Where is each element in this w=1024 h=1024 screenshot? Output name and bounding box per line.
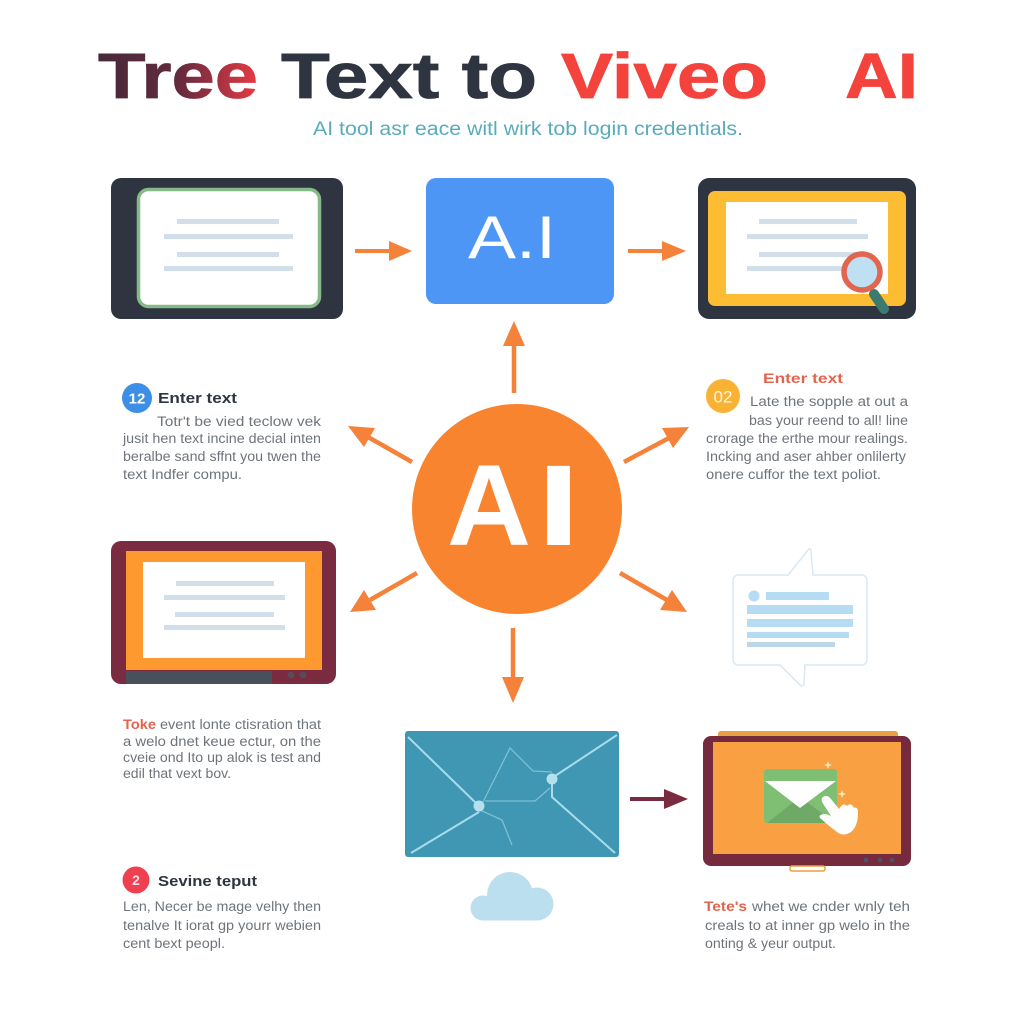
title: Text to: [281, 40, 537, 112]
panel: teal envelope: [405, 731, 619, 857]
text block: step 12: Totr't be vied teclow vek: [157, 414, 321, 429]
text block: Tete's: [704, 898, 910, 951]
panel: maroon tablet: [111, 541, 336, 684]
text block: Tete's: Tete's: [704, 898, 747, 914]
text block: step 2: [122, 866, 321, 951]
badge: 12: [122, 383, 152, 413]
arrow: envelope to tablet: [630, 789, 688, 809]
text block: Tete's: onting & yeur output.: [705, 936, 836, 951]
icon: hand pointer: [820, 796, 858, 834]
icon: green envelope: [764, 769, 837, 823]
arrow: lower left: [350, 573, 417, 612]
text block: step 12: jusit hen text incine decial inten: [122, 431, 321, 446]
text block: step 2: tenalve It iorat gp yourr webien: [123, 918, 321, 933]
text block: Tete's: whet we cnder wnly teh: [751, 899, 910, 914]
text block: step 02: [706, 370, 909, 482]
arrow: upper left: [348, 426, 412, 462]
text block: step 02: Late the sopple at out a: [750, 394, 909, 409]
central AI circle: [412, 404, 622, 614]
panel: chat bubble: [733, 549, 867, 686]
arrow: down: [502, 628, 524, 703]
text block: Toke: event lonte ctisration that: [160, 717, 321, 732]
badge: 2: [122, 866, 150, 894]
panel: text input tablet: [111, 178, 343, 319]
badge: 02: [706, 379, 740, 413]
text block: step 2: Sevine teput: [158, 873, 257, 890]
arrow: upper right: [624, 427, 689, 462]
text block: Toke: [123, 716, 321, 781]
panel: email tablet: [703, 731, 911, 871]
text block: step 02: onere cuffor the text poliot.: [706, 467, 881, 482]
text block: Toke: edil that vext bov.: [123, 766, 231, 781]
badge: 2: 2: [132, 872, 140, 888]
subtitle: AI tool asr eace witl wirk tob login credentials.: [313, 119, 743, 140]
panel: A.I blue box: [426, 178, 614, 304]
text block: Toke: a welo dnet keue ectur, on the: [123, 734, 321, 749]
text block: step 12: beralbe sand sffnt you twen the: [123, 449, 321, 464]
icon: cloud: [470, 872, 554, 920]
title: Tree: [98, 40, 258, 112]
text block: step 12: Enter text: [158, 390, 237, 407]
panel: review tablet with magnifier: [698, 178, 916, 319]
arrow: AI to review: [628, 241, 686, 261]
text block: step 02: bas your reend to all! line: [749, 413, 908, 428]
arrow: up: [503, 321, 525, 393]
text block: Tete's: creals to at inner gp welo in the: [705, 918, 910, 933]
icon: magnifier: [844, 254, 884, 309]
central AI circle: A: [447, 442, 531, 570]
badge: 12: 12: [129, 390, 145, 408]
text block: Toke: cveie ond Ito up alok is test and: [123, 750, 321, 765]
text block: Toke: Toke: [123, 716, 156, 732]
text block: step 02: Enter text: [763, 370, 843, 386]
text block: step 12: text Indfer compu.: [123, 467, 242, 482]
title: [98, 40, 918, 112]
text block: step 02: crorage the erthe mour realings.: [706, 431, 908, 446]
title: AI: [845, 40, 918, 112]
text block: step 12: [122, 383, 321, 482]
panel: A.I blue box: A.I: [468, 204, 556, 271]
central AI circle: I: [536, 442, 580, 570]
arrow: input to AI: [355, 241, 412, 261]
text block: step 2: Len, Necer be mage velhy then: [123, 899, 321, 914]
badge: 02: 02: [714, 388, 732, 406]
arrow: lower right: [620, 573, 687, 612]
title: Viveo: [561, 40, 768, 112]
text block: step 2: cent bext peopl.: [123, 936, 225, 951]
text block: step 02: Incking and aser ahber onlilerty: [706, 449, 906, 464]
